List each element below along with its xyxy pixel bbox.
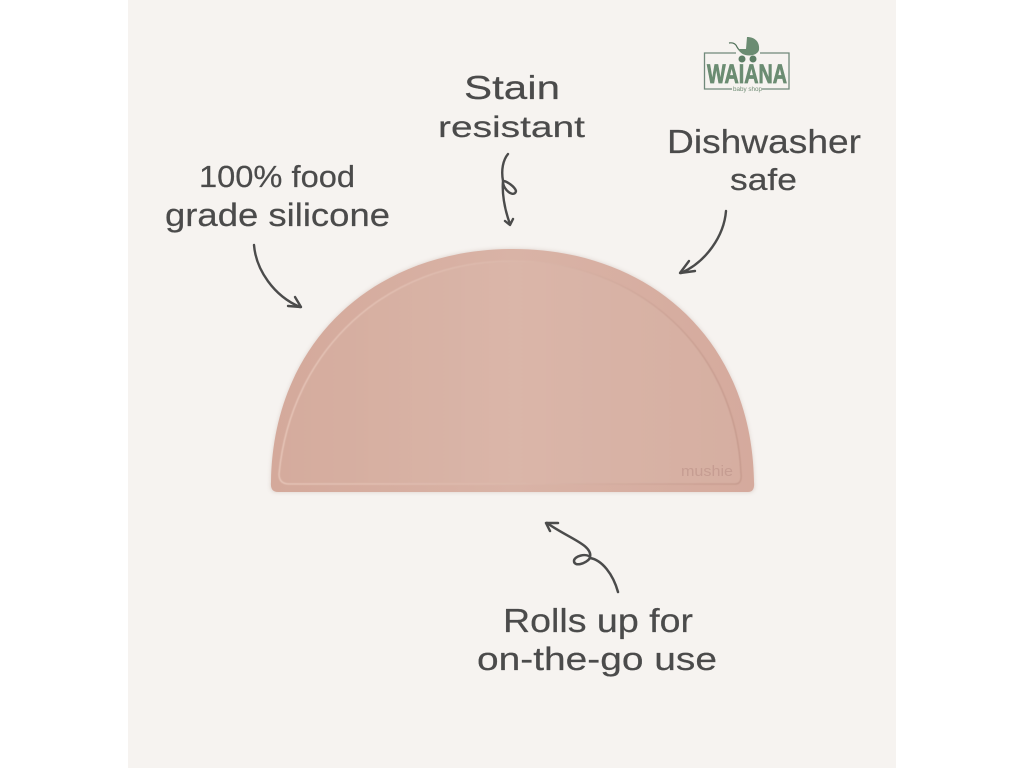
label: food grade silicone: grade silicone bbox=[165, 197, 390, 233]
arrow: rolls up bbox=[546, 523, 618, 592]
brand mark on placemat: mushie bbox=[681, 463, 733, 480]
label: dishwasher safe: safe bbox=[730, 162, 797, 197]
label: dishwasher safe bbox=[667, 123, 861, 197]
placemat bbox=[271, 249, 754, 492]
label: stain resistant bbox=[438, 69, 586, 144]
label: stain resistant: Stain bbox=[464, 69, 560, 106]
arrow: food grade silicone bbox=[254, 245, 301, 307]
logo tagline: baby shop bbox=[733, 87, 763, 93]
label: stain resistant: resistant bbox=[438, 111, 586, 144]
background panel bbox=[128, 0, 896, 768]
logo frame bbox=[704, 53, 789, 89]
arrow: stain resistant bbox=[502, 154, 516, 225]
label: food grade silicone bbox=[165, 159, 390, 233]
icon: pram bbox=[729, 37, 759, 62]
arrow: dishwasher safe bbox=[680, 211, 726, 273]
logo wordmark: WAIANA bbox=[707, 59, 787, 89]
label: rolls up: on-the-go use bbox=[477, 641, 717, 677]
label: rolls up: Rolls up for bbox=[503, 602, 693, 639]
label: dishwasher safe: Dishwasher bbox=[667, 123, 861, 160]
label: rolls up bbox=[477, 602, 717, 677]
label: food grade silicone: 100% food bbox=[199, 159, 355, 194]
logo: Waiana baby shop bbox=[704, 37, 789, 93]
